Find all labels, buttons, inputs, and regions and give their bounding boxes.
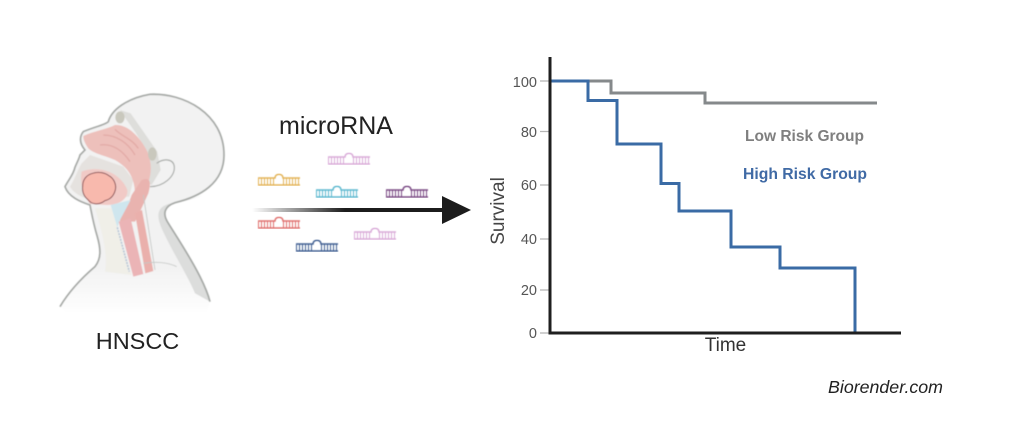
- sinus: [148, 147, 157, 161]
- legend: high risk group: High Risk Group: [743, 166, 867, 183]
- icon: microRNA pink top: [328, 153, 370, 164]
- cervical dashes: [117, 227, 129, 272]
- icon: microRNA red: [258, 217, 300, 228]
- arrow: microRNA to survival: [252, 196, 471, 224]
- x axis title: Time: [705, 335, 746, 356]
- y axis title: Survival: [488, 177, 509, 245]
- tumour: [83, 172, 116, 204]
- icon: microRNA yellow: [258, 174, 300, 185]
- throat: [120, 179, 150, 222]
- y axis tick labels: 100: [513, 75, 537, 91]
- heading: microRNA: microRNA: [279, 112, 393, 140]
- y axis ticks: [540, 81, 549, 333]
- icon: microRNA pink lower: [354, 228, 396, 239]
- axes: [550, 57, 901, 333]
- spine line: [143, 195, 177, 270]
- oral cavity and tongue: [81, 169, 127, 205]
- icon: microRNA purple: [386, 186, 428, 197]
- y axis tick labels: 0: [529, 326, 537, 342]
- back of neck shading: [158, 193, 210, 302]
- larynx airway: [111, 200, 131, 227]
- head silhouette fill: [60, 94, 224, 313]
- icon: microRNA navy: [296, 240, 338, 251]
- chart: survival curves: [488, 57, 901, 356]
- trachea: [119, 218, 143, 277]
- grey inner face band: [70, 155, 133, 201]
- front neck tint: [95, 208, 132, 275]
- high risk curve: [550, 81, 855, 333]
- y axis tick labels: [513, 75, 537, 342]
- label: HNSCC: HNSCC: [96, 328, 179, 354]
- nasal cavity: [83, 125, 151, 195]
- oesophagus: [135, 210, 153, 273]
- credit: Biorender.com: Biorender.com: [828, 377, 943, 397]
- y axis tick labels: 80: [521, 125, 537, 141]
- nasal folds: [100, 129, 138, 162]
- skull base grey band: [120, 110, 161, 185]
- icon: microRNA cyan: [316, 186, 358, 197]
- icon: head and neck anatomy with tumour: [60, 94, 224, 313]
- legend: low risk group: Low Risk Group: [745, 128, 864, 145]
- y axis tick labels: 20: [521, 283, 537, 299]
- y axis tick labels: 60: [521, 178, 537, 194]
- low risk curve: [550, 81, 877, 103]
- head outline: [60, 94, 224, 307]
- y axis tick labels: 40: [521, 232, 537, 248]
- ear: [150, 160, 174, 187]
